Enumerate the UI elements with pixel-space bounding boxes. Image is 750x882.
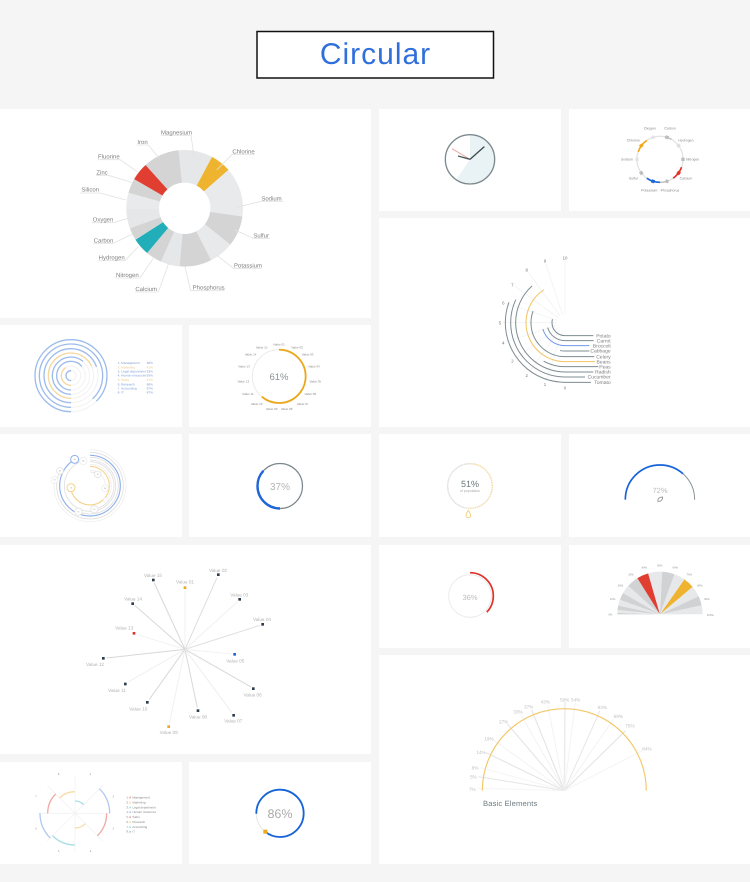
axis numbers: 3 [113, 827, 114, 830]
concentric rings [35, 340, 107, 412]
fan tick labels: 10% [610, 598, 615, 601]
leader lines and element labels: Silicon [81, 186, 99, 193]
value labels: Value 01 [176, 579, 194, 585]
value labels: Value 13 [115, 625, 133, 630]
donut chart [125, 149, 244, 268]
leader lines and element labels: Sodium [261, 195, 282, 202]
value labels: Value 03 [230, 592, 248, 597]
gauge labels: Value 11 [242, 392, 254, 396]
title: Circular [320, 38, 431, 71]
fan tick labels: 100% [707, 614, 714, 617]
rings [54, 450, 126, 522]
radial axis lines and numbers: 5 [499, 320, 501, 325]
fan tick labels: 20% [618, 584, 623, 587]
leader lines and element labels: Zinc [96, 169, 108, 176]
panel: 86% ring [189, 762, 371, 864]
gauge labels: Value 14 [245, 353, 256, 356]
value bubbles: 57 [77, 511, 80, 513]
panel: segmented donut chart [0, 109, 371, 318]
leader lines and element labels: Oxygen [93, 216, 113, 223]
axis numbers: 2 [113, 795, 114, 798]
radial axis lines and numbers: 8 [525, 268, 528, 273]
ring labels: Potassium [641, 189, 658, 193]
legend: Research [132, 820, 145, 824]
legend: 7. [126, 825, 129, 829]
ring gauge [258, 464, 302, 508]
ring labels: Oxygen [644, 127, 656, 131]
value labels: Value 14 [124, 596, 142, 601]
value: 72% [652, 486, 668, 495]
panel: semicircular fan chart [569, 545, 750, 648]
ring labels: Sulfur [629, 177, 638, 181]
radial axis lines and numbers: 10 [563, 255, 567, 260]
ring labels: Phosphorus [661, 189, 679, 193]
panel: radial vegetable bars [379, 218, 750, 427]
ring labels: Hydrogen [678, 139, 694, 143]
legend: 5. Sales [118, 378, 129, 382]
vegetable labels: Peas [599, 364, 611, 370]
legend: 1. Management [118, 361, 140, 365]
legend: 2. [126, 801, 129, 804]
gauge ring [252, 350, 306, 403]
ring labels [621, 127, 699, 193]
panel: 37% ring [189, 434, 371, 537]
legend: 55% [147, 374, 153, 378]
value bubbles: 28 [104, 487, 106, 490]
percentage labels: 37% [524, 704, 533, 710]
legend: 8. [126, 830, 129, 833]
leader lines and element labels: Magnesium [161, 129, 192, 136]
panel: clock [379, 109, 561, 211]
legend: 3. [126, 806, 129, 809]
gauge labels: Value 02 [291, 346, 303, 349]
value: 51% [461, 479, 479, 489]
axis numbers: 5 [58, 850, 60, 853]
value labels: Value 15 [144, 573, 162, 578]
percentage labels: 84% [642, 746, 652, 751]
icon: leaf [658, 497, 663, 501]
gauge labels: Value 08 [281, 407, 292, 411]
value labels: Value 07 [224, 718, 242, 724]
panel: ring with element markers [569, 109, 750, 211]
legend: 41% [147, 366, 153, 370]
legend: Human resources [132, 810, 156, 814]
leader lines and element labels: Carbon [94, 237, 113, 244]
leader lines and element labels [80, 129, 283, 292]
fan tick labels: 90% [704, 598, 710, 601]
value bubbles: 78 [53, 479, 56, 481]
vegetable labels: Broccoli [593, 343, 611, 349]
panel: 36% ring [379, 545, 561, 648]
gauge labels: Value 13 [238, 365, 250, 368]
legend: Sales [132, 815, 140, 819]
legend: 38% [147, 361, 153, 365]
ring labels: Sodium [621, 158, 633, 162]
vegetable labels: Celery [596, 354, 611, 360]
vegetable labels [588, 333, 611, 385]
vegetable labels: Cucumber [588, 374, 611, 380]
value labels: Value 08 [189, 714, 207, 720]
radial axis lines and numbers: 4 [502, 340, 505, 345]
legend: 6. [126, 820, 129, 824]
legend: 3. Legal department [118, 370, 146, 374]
legend: 7. Accounting [118, 387, 137, 391]
value labels: Value 09 [160, 730, 178, 735]
fan tick labels: 0% [608, 613, 612, 616]
legend: 4. [126, 810, 129, 814]
half ring gauge [625, 465, 695, 534]
leader lines and element labels: Hydrogen [99, 254, 125, 261]
value labels: Value 04 [253, 617, 271, 622]
legend: Legal department [132, 806, 156, 809]
legend: 87% [147, 391, 153, 395]
value bubbles: 10 [97, 473, 99, 476]
percentage labels: 5% [470, 774, 477, 780]
gauge labels: Value 01 [273, 343, 285, 346]
legend: 8. IT [118, 391, 124, 395]
title [257, 32, 494, 78]
value bubbles: 82 [59, 470, 61, 472]
ring labels: Carbon [664, 127, 676, 131]
value labels [86, 568, 271, 735]
fan tick labels: 30% [628, 573, 634, 576]
panel: 51% of population [379, 434, 561, 537]
vegetable labels: Potato [596, 333, 611, 339]
legend [118, 361, 153, 395]
radial axis lines and numbers: 0 [564, 385, 566, 390]
panel: sector arcs chart [0, 762, 182, 864]
percentage labels: 54% [571, 697, 580, 703]
legend: Accounting [132, 825, 147, 829]
ring labels: Calcium [680, 177, 692, 181]
gauge labels: Value 09 [266, 407, 277, 411]
percentage labels: 63% [598, 705, 607, 710]
gauge labels: Value 15 [256, 346, 267, 349]
half radial spokes and arc [477, 702, 646, 873]
fan wedges [630, 584, 690, 644]
panel: 72% half gauge [569, 434, 750, 537]
vegetable labels: Cabbage [590, 348, 611, 354]
dotted ring [448, 464, 492, 508]
value bubbles: 96 [82, 460, 85, 462]
gauge labels: Value 05 [310, 380, 321, 383]
leader lines and element labels: Potassium [234, 262, 262, 269]
leader lines and element labels: Sulfur [253, 232, 269, 239]
radial bars [505, 263, 625, 382]
gauge labels: Value 07 [297, 402, 308, 406]
heading: basic elements: Basic Elements [483, 799, 537, 808]
sector arcs and axes [26, 764, 124, 863]
value labels: Value 10 [129, 706, 147, 711]
ring labels: Nitrogen [686, 158, 699, 162]
legend: 53% [147, 370, 153, 374]
leader lines and element labels: Calcium [135, 286, 157, 292]
value labels: Value 12 [86, 662, 104, 667]
axis numbers: 7 [35, 795, 37, 798]
gauge labels: Value 04 [308, 365, 320, 368]
gauge labels [238, 343, 321, 411]
legend: 2. Marketing [118, 366, 135, 370]
percentage labels: 69% [614, 714, 623, 719]
spokes and dots [102, 573, 264, 728]
percentage labels [469, 697, 652, 792]
value bubbles: 76 [70, 487, 72, 489]
legend: Management [132, 796, 150, 799]
fan tick labels: 80% [697, 584, 703, 587]
value: 86% [267, 807, 293, 821]
value bubbles: 47 [93, 508, 96, 511]
fan tick labels: 70% [687, 573, 692, 576]
legend: 5. [126, 815, 129, 819]
fan tick labels: 60% [673, 566, 678, 569]
clock dial and hands [445, 135, 495, 184]
value labels: Value 06 [244, 692, 262, 698]
leader lines and element labels: Chlorine [232, 148, 255, 155]
ring chart [630, 130, 689, 189]
percentage labels: 50% [560, 697, 569, 702]
radial axis lines and numbers: 9 [544, 258, 546, 263]
icon: water drop [466, 510, 471, 518]
value labels: Value 11 [108, 688, 126, 693]
percentage labels: 33% [513, 709, 523, 715]
panel: concentric progress rings [0, 325, 182, 427]
vegetable labels: Beans [596, 359, 611, 365]
value labels: Value 02 [209, 568, 227, 573]
axis numbers: 6 [35, 827, 37, 830]
radial axis lines and numbers: 3 [511, 359, 514, 364]
vegetable labels: Tomato [594, 380, 611, 385]
radial axis lines and numbers: 7 [511, 282, 514, 287]
radial axis lines and numbers: 1 [544, 382, 546, 387]
percentage labels: 8% [472, 765, 478, 770]
caption: of population [460, 489, 480, 493]
leader lines and element labels: Phosphorus [193, 284, 225, 291]
fan tick labels [608, 564, 714, 617]
leader lines and element labels: Nitrogen [116, 272, 139, 278]
legend: 68% [147, 383, 153, 386]
value: 36% [462, 593, 478, 602]
panel: 61% ring gauge [189, 325, 371, 427]
radial axis lines and numbers: 2 [525, 373, 528, 378]
legend: 87% [147, 387, 153, 391]
panel: multi-ring with bubbles [0, 434, 182, 537]
legend: IT [132, 830, 135, 833]
axis numbers: 4 [90, 850, 92, 853]
legend: 4. Human resources [118, 374, 146, 378]
value: 37% [270, 482, 290, 493]
radial axis lines and numbers: 6 [502, 300, 505, 305]
percentage labels: 75% [625, 723, 635, 729]
leader lines and element labels: Fluorine [98, 153, 120, 160]
vegetable labels: Radish [595, 369, 611, 375]
legend: 67% [147, 378, 153, 382]
vegetable labels: Carrot [597, 338, 611, 344]
panel: basic elements half radial [379, 655, 750, 873]
ring gauge [447, 573, 493, 619]
panel: radial lollipop chart [0, 545, 371, 754]
legend: Marketing [132, 801, 145, 804]
value bubbles: 59 [74, 458, 76, 461]
ring gauge [256, 789, 304, 837]
axis numbers: 1 [90, 773, 91, 776]
legend: 6. Research [118, 383, 135, 386]
ring labels: Chlorine [627, 139, 640, 143]
axis numbers [35, 773, 114, 853]
gauge labels: Value 06 [305, 392, 316, 396]
legend: 1. [126, 796, 129, 799]
value labels: Value 05 [226, 658, 244, 663]
legend [126, 796, 156, 833]
percentage labels: 27% [499, 719, 508, 725]
value bubbles [51, 455, 108, 515]
leader lines and element labels: Iron [137, 139, 148, 145]
percentage labels: 7% [469, 787, 476, 792]
gauge value: 61% [269, 372, 289, 383]
gauge labels: Value 12 [238, 380, 249, 383]
fan tick labels: 40% [642, 566, 647, 569]
fan tick labels: 50% [657, 564, 662, 567]
percentage labels: 19% [484, 736, 494, 741]
axis numbers: 8 [58, 773, 60, 776]
gauge labels: Value 03 [302, 353, 313, 356]
gauge labels: Value 10 [251, 402, 262, 406]
percentage labels: 14% [476, 750, 486, 755]
radial axis lines and numbers [499, 255, 567, 390]
percentage labels: 43% [541, 699, 550, 704]
